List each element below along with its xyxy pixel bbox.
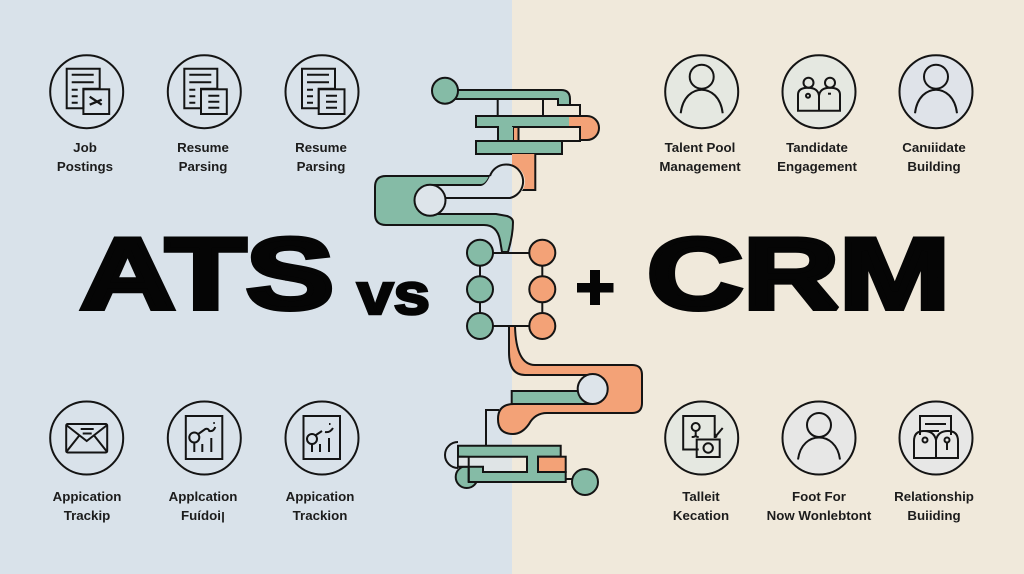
node network: green and orange nodes bbox=[467, 240, 555, 339]
label: Application Trackip: Appication bbox=[53, 489, 121, 504]
icon: candidate engagement bbox=[782, 55, 856, 128]
label: Resume Parsing: Parsing bbox=[179, 159, 227, 174]
label: Resume Parsing second: Resume bbox=[295, 140, 347, 155]
label: Application Fuidoiy bbox=[169, 489, 237, 523]
label: Resume Parsing: Resume bbox=[177, 140, 229, 155]
icon: envelope bbox=[50, 402, 123, 474]
label: Foot For Now Wonlebtont bbox=[767, 489, 872, 523]
top connector: node and bar bbox=[432, 78, 580, 116]
label: Relationship Building bbox=[894, 489, 974, 523]
label: Foot For Now Wonlebtont: Foot For bbox=[792, 489, 846, 504]
title: ATS: ATS bbox=[80, 218, 334, 330]
icon: resume parsing bbox=[168, 55, 241, 128]
label: Tandidate Engagement: Tandidate bbox=[786, 140, 848, 155]
icon: resume parsing second bbox=[286, 55, 358, 128]
icon: application chart second bbox=[286, 402, 358, 474]
icon: job postings bbox=[50, 55, 123, 128]
label: Application Fuidoiy: Applcation bbox=[169, 489, 237, 504]
title: vs: vs bbox=[357, 262, 430, 327]
label: Application Trackion: Trackion bbox=[293, 508, 347, 523]
label: Job Postings: Job bbox=[73, 140, 97, 155]
label: Resume Parsing second bbox=[295, 140, 347, 174]
label: Tandidate Engagement bbox=[777, 140, 857, 174]
label: Resume Parsing second: Parsing bbox=[297, 159, 345, 174]
teal loop with open circles bbox=[375, 164, 525, 252]
central connector diagram bbox=[375, 78, 642, 495]
icon: application chart bbox=[168, 402, 241, 474]
label: Talent Pool Management: Talent Pool bbox=[665, 140, 735, 155]
label: Foot For Now Wonlebtont: Now Wonlebtont bbox=[767, 508, 872, 523]
label: Relationship Building: Buiiding bbox=[907, 508, 961, 523]
label: Application Trackip bbox=[53, 489, 121, 523]
icon: relationship building bbox=[900, 402, 972, 474]
label: Candidate Building: Building bbox=[907, 159, 961, 174]
label: Talleit Kecation: Talleit bbox=[682, 489, 720, 504]
label: Candidate Building: Canıiidate bbox=[902, 140, 966, 155]
bottom connector: bars and nodes bbox=[445, 442, 598, 495]
label: Application Fuidoiy: Fuídoiן bbox=[181, 508, 225, 523]
label: Job Postings bbox=[57, 140, 113, 174]
icon: person bbox=[782, 402, 856, 474]
label: Tandidate Engagement: Engagement bbox=[777, 159, 857, 174]
icon: talent pool person bbox=[665, 55, 738, 128]
panel: ATS background bbox=[0, 0, 512, 574]
label: Application Trackion: Appication bbox=[286, 489, 354, 504]
label: Resume Parsing bbox=[177, 140, 229, 174]
orange stem bbox=[512, 154, 535, 190]
icon: plus sign bbox=[577, 270, 614, 305]
label: Talent Pool Management: Management bbox=[659, 159, 741, 174]
panel: CRM background bbox=[512, 0, 1024, 574]
label: Talleit Kecation: Kecation bbox=[673, 508, 729, 523]
label: Candidate Building bbox=[902, 140, 966, 174]
icon: talent location bbox=[665, 402, 738, 474]
top connector: stacked bars bbox=[476, 116, 599, 154]
label: Talleit Kecation bbox=[673, 489, 729, 523]
icon: candidate building person bbox=[900, 55, 972, 128]
title: CRM: CRM bbox=[647, 218, 950, 330]
label: Talent Pool Management bbox=[659, 140, 741, 174]
label: Application Trackion bbox=[286, 489, 354, 523]
label: Relationship Building: Relationship bbox=[894, 489, 974, 504]
lower orange loop bbox=[486, 326, 642, 446]
label: Job Postings: Postings bbox=[57, 159, 113, 174]
label: Application Trackip: Trackip bbox=[64, 508, 110, 523]
